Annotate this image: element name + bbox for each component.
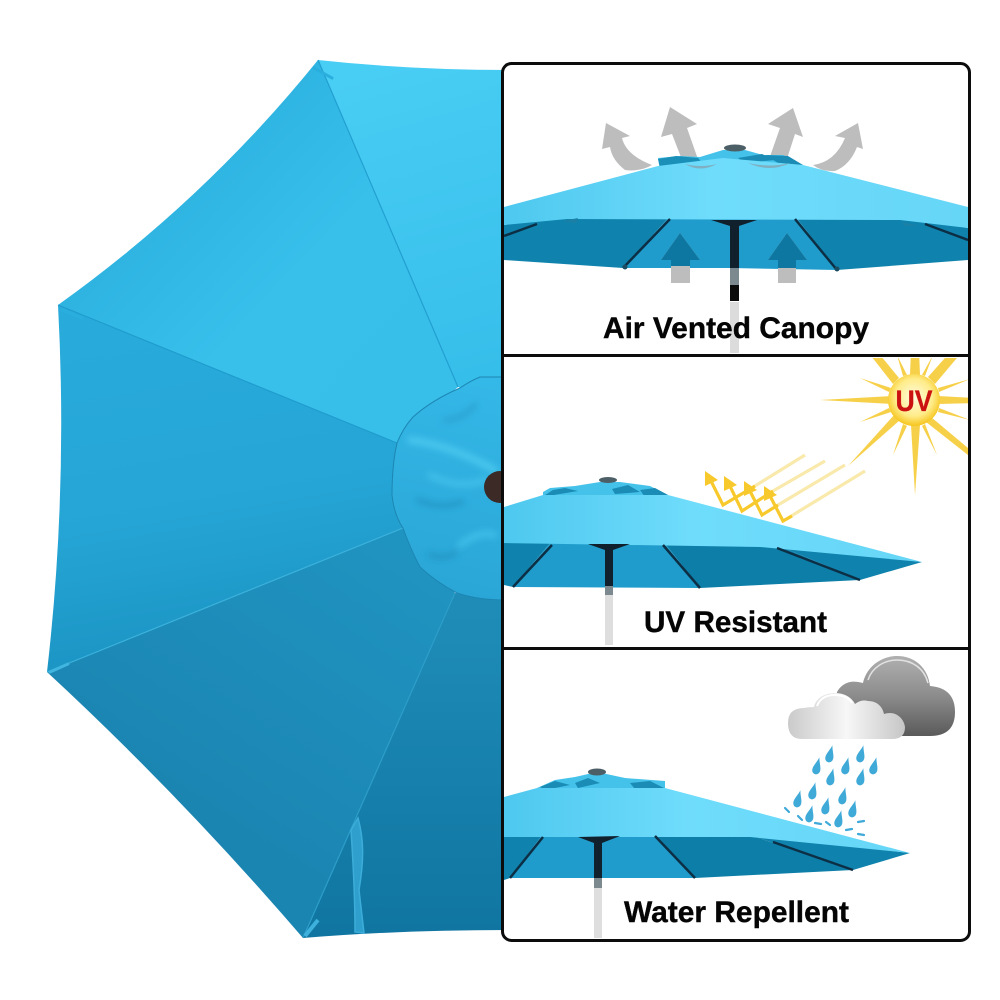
canopy panel: left — [47, 305, 403, 672]
canopy vents — [658, 144, 803, 166]
canopy panel: bottom — [303, 593, 510, 938]
panel: air vented canopy — [504, 107, 968, 353]
canopy vents — [543, 477, 668, 495]
canopy ribs — [513, 544, 860, 588]
pole — [730, 268, 739, 353]
canopy underside — [504, 834, 910, 880]
caption: Water Repellent — [624, 896, 849, 929]
canopy panel: lower left — [47, 528, 455, 938]
main canopy seen from above — [47, 60, 516, 938]
caption: Air Vented Canopy — [603, 312, 869, 345]
pole — [605, 548, 613, 645]
panel: water repellent — [504, 656, 955, 938]
sun with UV label — [820, 358, 968, 494]
canopy panel: top — [318, 60, 510, 400]
canopy top — [504, 158, 968, 228]
UV label: UV — [896, 385, 932, 418]
canopy ribs and arrows under canopy — [504, 218, 968, 283]
air arrows seen through canopy — [685, 163, 790, 168]
raindrops — [785, 744, 880, 835]
pole — [594, 840, 602, 938]
hub knob — [484, 471, 516, 503]
feature panel frame — [502, 64, 970, 940]
canopy ribs — [510, 836, 853, 878]
canopy top — [504, 788, 910, 853]
canopy vents — [537, 768, 665, 788]
grey air arrows above canopy — [602, 107, 863, 171]
canopy underside — [504, 541, 922, 588]
canopy underside — [504, 216, 968, 270]
reflected sun rays — [705, 455, 865, 521]
canopy top — [504, 495, 922, 562]
canopy panel: upper left — [58, 60, 458, 443]
dark storm cloud — [837, 656, 955, 736]
caption: UV Resistant — [644, 606, 827, 639]
panel: UV resistant — [504, 350, 975, 645]
canopy seams and tab — [47, 60, 458, 938]
light cloud — [788, 693, 905, 739]
central vent flap — [392, 377, 505, 600]
